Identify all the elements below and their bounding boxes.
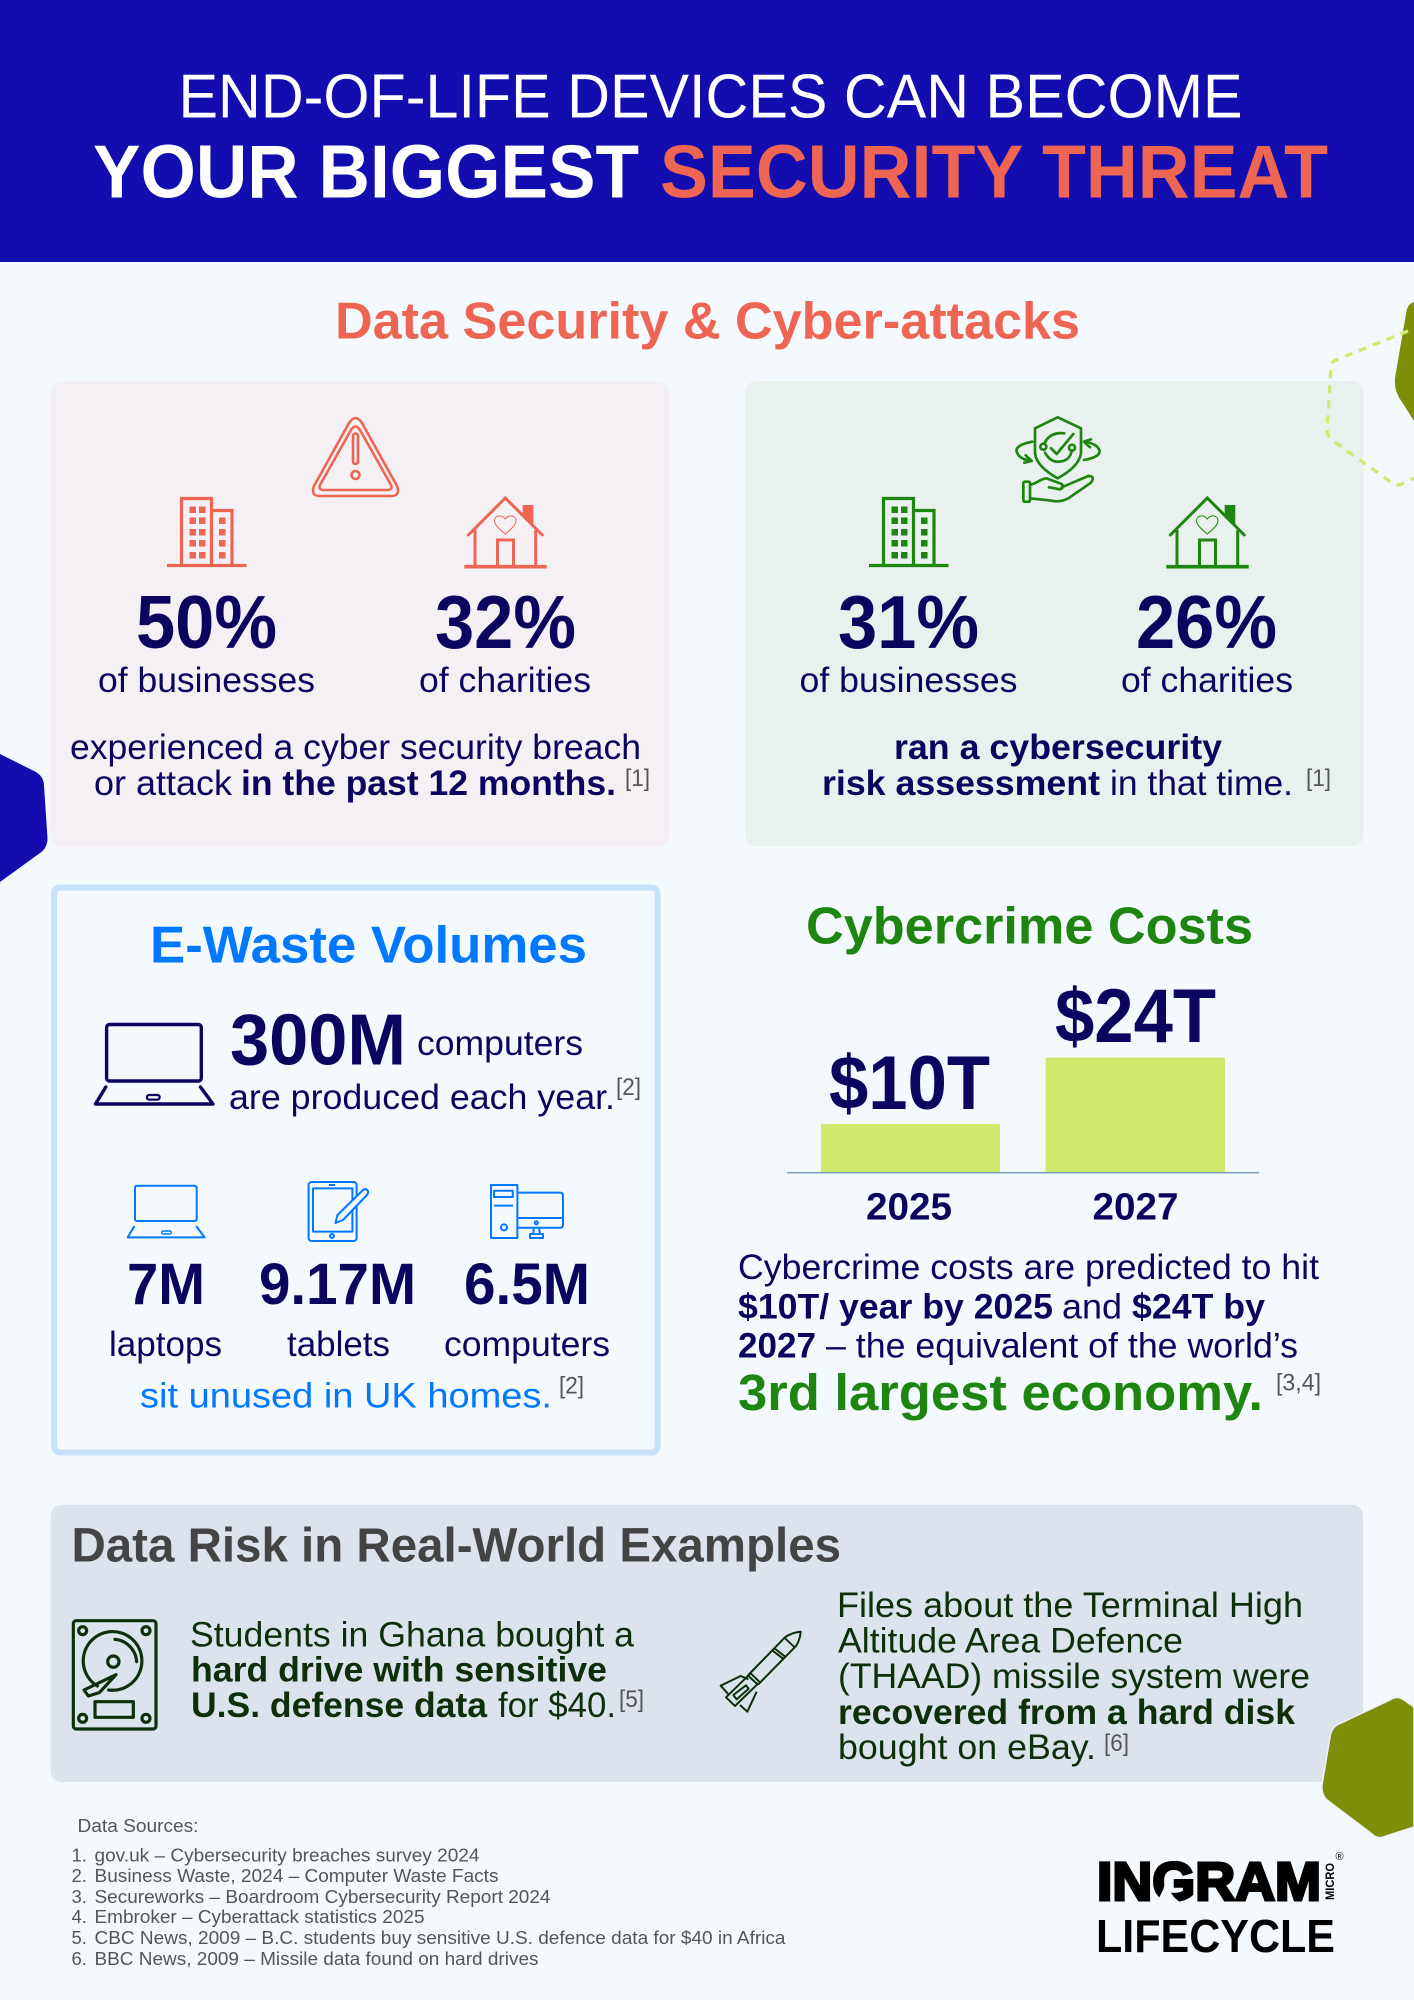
logo: ingram micro lifecycle: INGRAM xyxy=(1097,1852,1321,1912)
source 4: Embroker – Cyberattack statistics 2025 xyxy=(94,1906,424,1927)
stat: 6.5M computers: computers xyxy=(444,1325,610,1364)
stat: 300M computers xyxy=(229,1000,641,1117)
text: thaad files: Altitude Area Defence xyxy=(838,1622,1183,1660)
text: cost prediction: – the equivalent of the world’s xyxy=(826,1326,1298,1366)
source 3: 3. xyxy=(72,1886,87,1907)
icon: tablet and pen xyxy=(309,1182,368,1241)
text: assessment statement: ran a cybersecurity xyxy=(894,728,1223,767)
source 1: 1. xyxy=(72,1845,87,1866)
logo: ingram micro lifecycle xyxy=(1096,1851,1344,1962)
text: assessment statement xyxy=(822,728,1331,803)
stat: 9.17M tablets xyxy=(259,1252,416,1364)
stat: 300M computers: 300M xyxy=(230,1000,406,1080)
panel: real-world examples xyxy=(50,1505,1363,1782)
stat: 7M laptops xyxy=(109,1252,222,1364)
stat: 7M laptops: 7M xyxy=(127,1252,205,1317)
text: thaad files: [6] xyxy=(1104,1730,1129,1757)
icon: missile xyxy=(721,1632,801,1712)
bar chart: $10T xyxy=(829,1041,990,1126)
section: cybercrime costs xyxy=(738,898,1321,1421)
source 5: CBC News, 2009 – B.C. students buy sensitive U.S. defence data for $40 in Africa xyxy=(94,1927,786,1948)
heading: e-waste volumes: E-Waste Volumes xyxy=(150,917,587,975)
stat: 9.17M tablets: 9.17M xyxy=(259,1252,416,1317)
stat: 300M computers: are produced each year. xyxy=(229,1078,615,1117)
heading: cybercrime costs: Cybercrime Costs xyxy=(806,898,1253,956)
text: cost prediction: 2027 xyxy=(738,1326,816,1366)
source 6: BBC News, 2009 – Missile data found on hard drives xyxy=(94,1948,538,1969)
panel: risk assessment statistics xyxy=(745,381,1364,846)
stat: 32% of charities xyxy=(419,580,591,700)
text: breach statement xyxy=(70,728,650,803)
source 2: Business Waste, 2024 – Computer Waste Facts xyxy=(94,1865,498,1886)
title line two: YOUR BIGGEST xyxy=(93,130,639,214)
icon: shield in hand xyxy=(1017,417,1100,502)
text: cost prediction: $10T/ year by 2025 xyxy=(738,1288,1053,1326)
icon: office building xyxy=(869,498,948,566)
text: thaad files xyxy=(837,1586,1310,1767)
panel: cyber breach statistics xyxy=(50,381,670,846)
stat: 32% of charities: 32% xyxy=(435,580,576,664)
stat: 31% of businesses xyxy=(800,580,1018,700)
stat: 300M computers: computers xyxy=(417,1024,583,1063)
text: ghana students: hard drive with sensitive xyxy=(191,1651,607,1690)
text: ghana students: for $40. xyxy=(498,1686,616,1725)
title line two: SECURITY THREAT xyxy=(660,130,1328,214)
text: thaad files: (THAAD) missile system were xyxy=(838,1657,1310,1696)
text: assessment statement: risk assessment xyxy=(822,764,1100,803)
stat: 32% of charities: of charities xyxy=(419,661,591,700)
title line one: END-OF-LIFE DEVICES CAN BECOME xyxy=(178,63,1242,132)
logo: ingram micro lifecycle: MICRO xyxy=(1323,1863,1337,1900)
text: cost prediction xyxy=(738,1248,1321,1421)
heading: real-world examples: Data Risk in Real-World Examples xyxy=(72,1520,841,1573)
stat: 9.17M tablets: tablets xyxy=(287,1325,390,1364)
stat: 6.5M computers xyxy=(444,1252,610,1364)
bar chart: 2025 xyxy=(866,1186,952,1228)
stat: 26% of charities xyxy=(1121,580,1293,700)
bar chart: $24T xyxy=(1055,974,1216,1059)
source 6: 6. xyxy=(72,1948,87,1969)
icon: desktop computer xyxy=(491,1185,563,1238)
stat: 300M computers: [2] xyxy=(616,1074,641,1101)
logo: ingram micro lifecycle: ® xyxy=(1336,1851,1344,1863)
text: breach statement: in the past 12 months. xyxy=(241,764,616,803)
text: thaad files: Files about the Terminal High xyxy=(837,1586,1303,1625)
bar chart: 2027 xyxy=(1092,1186,1178,1228)
source 1: gov.uk – Cybersecurity breaches survey 2024 xyxy=(94,1845,479,1866)
stat: 26% of charities: of charities xyxy=(1121,661,1293,700)
text: assessment statement: in that time. xyxy=(1110,764,1293,803)
panel: e-waste volumes xyxy=(54,888,658,1452)
data sources xyxy=(72,1815,786,1969)
text: cost prediction: $24T by xyxy=(1132,1288,1266,1326)
stat: 50% of businesses xyxy=(98,580,315,700)
stat: 7M laptops: laptops xyxy=(109,1325,222,1364)
source 3: Secureworks – Boardroom Cybersecurity Report 2024 xyxy=(94,1886,550,1907)
text: ghana students: U.S. defense data xyxy=(191,1686,488,1725)
icon: office building xyxy=(167,498,246,566)
text: breach statement: experienced a cyber security breach xyxy=(70,728,641,767)
decorative hexagon: top right olive xyxy=(1395,302,1414,421)
header banner xyxy=(0,0,1414,262)
text: sit unused: [2] xyxy=(559,1372,584,1400)
text: cost prediction: Cybercrime costs are predicted to hit xyxy=(738,1248,1319,1287)
stat: 50% of businesses: 50% xyxy=(136,580,277,664)
icon: charity house xyxy=(1166,498,1249,567)
stat: 31% of businesses: 31% xyxy=(838,580,979,664)
text: thaad files: bought on eBay. xyxy=(838,1728,1096,1767)
source 5: 5. xyxy=(72,1927,87,1948)
text: thaad files: recovered from a hard disk xyxy=(838,1693,1296,1732)
text: breach statement: [1] xyxy=(625,765,650,792)
decorative hexagon: dashed outline xyxy=(1327,331,1414,485)
data sources: Data Sources: xyxy=(78,1815,198,1836)
icon: hard drive xyxy=(73,1621,156,1729)
text: sit unused: sit unused in UK homes. xyxy=(140,1377,552,1416)
section heading: data security: Data Security & Cyber-attacks xyxy=(335,292,1080,350)
text: cost prediction: 3rd largest economy. xyxy=(738,1364,1263,1421)
stat: 26% of charities: 26% xyxy=(1136,580,1277,664)
icon: small laptop xyxy=(128,1186,204,1237)
text: ghana students: Students in Ghana bought a xyxy=(190,1616,635,1655)
stat: 6.5M computers: 6.5M xyxy=(464,1252,590,1317)
icon: large laptop xyxy=(96,1024,213,1104)
text: ghana students xyxy=(190,1616,644,1725)
text: breach statement: or attack xyxy=(94,764,233,803)
text: assessment statement: [1] xyxy=(1306,765,1331,792)
text: cost prediction: and xyxy=(1062,1288,1122,1326)
title line two xyxy=(93,130,1328,214)
source 2: 2. xyxy=(72,1865,87,1886)
icon: warning triangle xyxy=(313,418,398,496)
stat: 50% of businesses: of businesses xyxy=(98,661,315,700)
text: cost prediction: [3,4] xyxy=(1276,1370,1321,1396)
text: ghana students: [5] xyxy=(619,1686,644,1713)
bar chart xyxy=(787,974,1259,1228)
stat: 31% of businesses: of businesses xyxy=(800,661,1018,700)
source 4: 4. xyxy=(72,1906,87,1927)
icon: charity house xyxy=(464,498,547,567)
decorative hexagon: left blue xyxy=(0,754,48,882)
logo: ingram micro lifecycle: LIFECYCLE xyxy=(1096,1910,1335,1962)
decorative hexagon: bottom right olive xyxy=(1322,1698,1414,1838)
